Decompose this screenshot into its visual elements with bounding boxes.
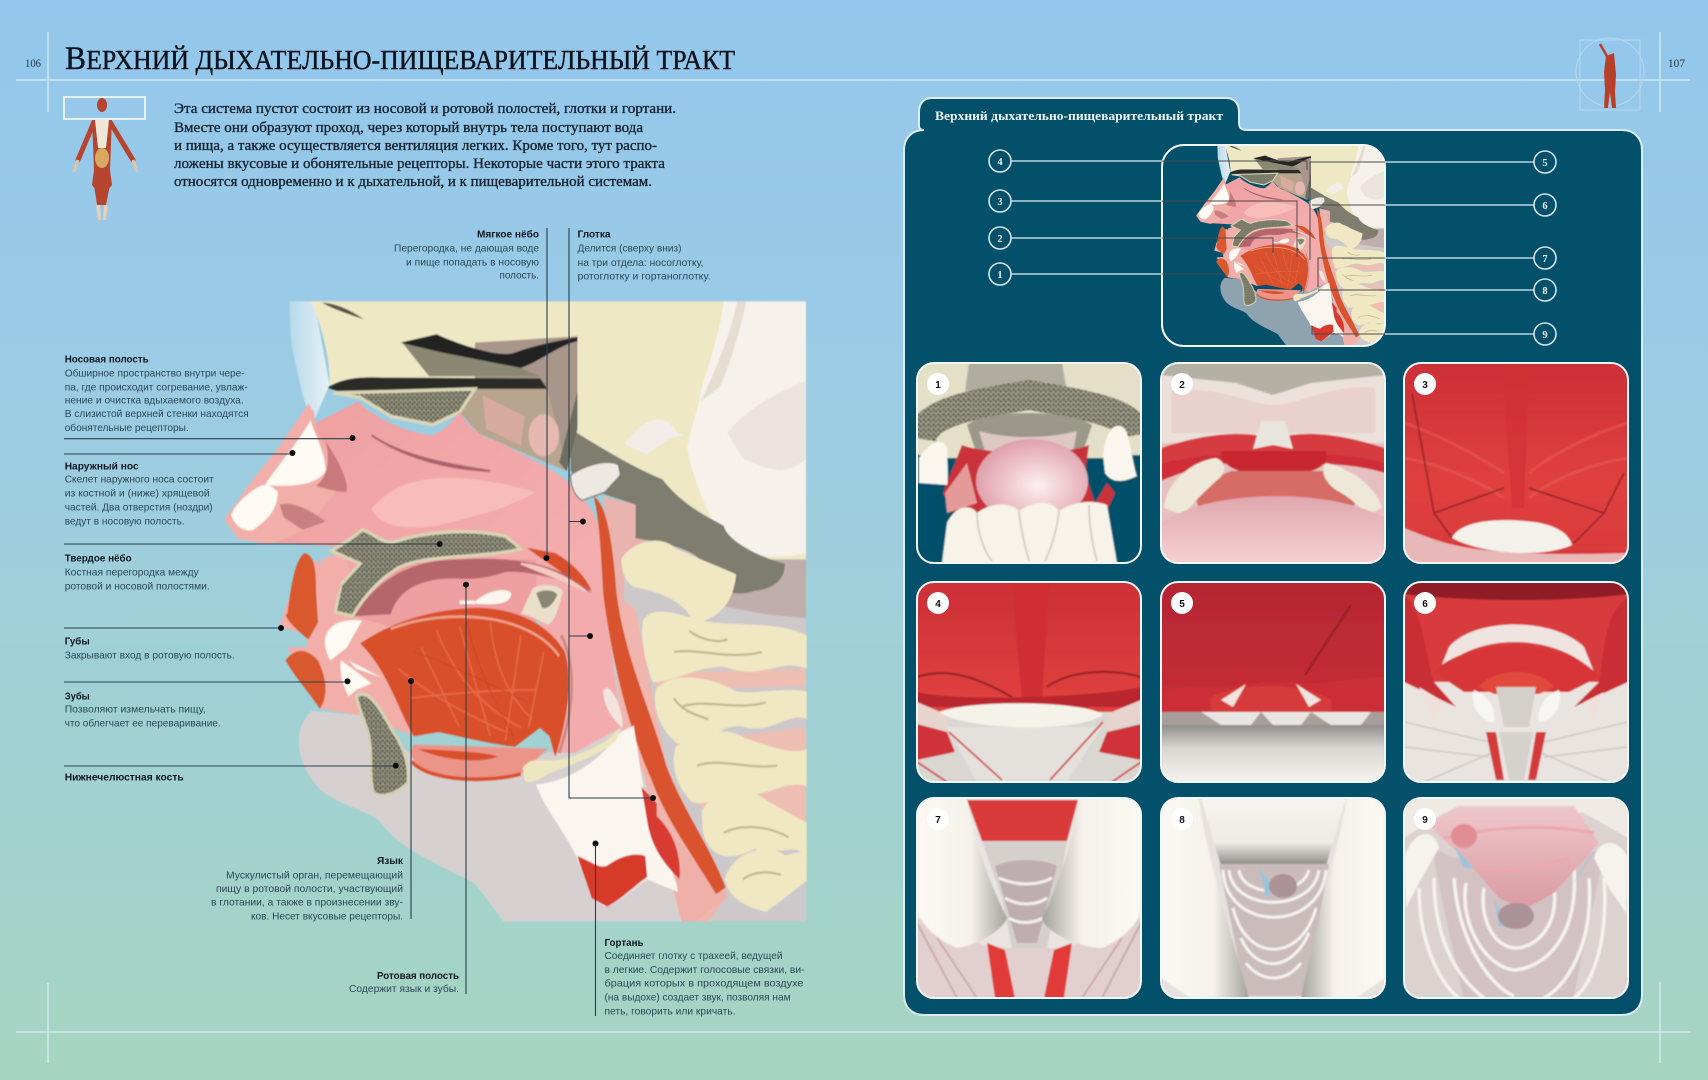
locator: small head section with numbered leaders: 1	[997, 270, 1003, 281]
intro text: ложены вкусовые и обонятельные рецепторы. Некоторые части этого тракта	[174, 156, 666, 172]
label: Мягкое нёбо	[394, 228, 539, 282]
anatomy illustration: head cross-section	[224, 301, 806, 921]
label: Глотка: Глотка	[578, 228, 611, 240]
label: Носовая полость: Обширное пространство внутри чере-	[65, 368, 245, 380]
label: Носовая полость: па, где происходит согревание, увлаж-	[65, 382, 248, 394]
label: Глотка: Делится (сверху вниз)	[578, 242, 682, 254]
label: Носовая полость	[65, 354, 249, 434]
thumbnail 3: soft palate	[1404, 363, 1628, 563]
label: Наружный нос: частей. Два отверстия (ноздри)	[65, 502, 213, 514]
label: Губы	[65, 636, 235, 662]
label: Наружный нос: из костной и (ниже) хрящевой	[65, 488, 210, 500]
label: Наружный нос	[65, 460, 214, 528]
thumbnail 4: uvula from behind: 4	[935, 599, 941, 610]
label: Ротовая полость: Ротовая полость	[377, 970, 459, 982]
thumbnail 9: epiglottis and vocal folds: 9	[1422, 815, 1428, 826]
label: Нижнечелюстная кость: Нижнечелюстная кость	[65, 772, 184, 784]
thumbnail 5: nasopharynx	[1161, 582, 1385, 782]
thumbnail 8: trachea view	[1161, 798, 1385, 998]
label: Язык: пищу в ротовой полости, участвующий	[216, 883, 403, 895]
thumbnail 3: soft palate: 3	[1422, 380, 1428, 391]
label: Носовая полость: Носовая полость	[65, 354, 149, 366]
label: Язык: Язык	[377, 855, 404, 867]
locator: small head section with numbered leaders: 2	[997, 234, 1003, 245]
label: Твердое нёбо: Костная перегородка между	[65, 566, 199, 578]
label: Носовая полость: В слизистой верхней стенки находятся	[65, 408, 249, 420]
icon: body locator figure left	[64, 97, 145, 220]
label: Ротовая полость: Содержит язык и зубы.	[349, 983, 459, 995]
label: Гортань: Соединяет глотку с трахеей, ведущей	[604, 950, 783, 962]
label: Гортань	[604, 937, 805, 1018]
label: Гортань: в легкие. Содержит голосовые связки, ви-	[604, 964, 805, 976]
panel: airway tour with tab	[904, 98, 1642, 1015]
label: Зубы: Позволяют измельчать пищу,	[65, 704, 206, 716]
label: Наружный нос: ведут в носовую полость.	[65, 516, 185, 528]
page number right: 107	[1668, 56, 1685, 70]
intro text: относятся одновременно и к дыхательной, и к пищеварительной системам.	[174, 174, 652, 190]
icon: body locator figure right	[1576, 38, 1644, 110]
thumbnail 1: view from mouth	[917, 363, 1141, 563]
label: Носовая полость: нение и очистка вдыхаемого воздуха.	[65, 394, 244, 406]
thumbnail 8: trachea view: 8	[1179, 815, 1185, 826]
label: Зубы	[65, 690, 221, 730]
label: Твердое нёбо: ротовой и носовой полостями.	[65, 580, 210, 592]
thumbnail 7: larynx from above	[917, 798, 1141, 998]
label: Гортань: брация которых в проходящем воздухе	[604, 978, 804, 990]
intro text	[174, 101, 676, 190]
label: Язык: Мускулистый орган, перемещающий	[226, 870, 403, 882]
locator: small head section with numbered leaders: 7	[1542, 254, 1548, 265]
label: Мягкое нёбо: Мягкое нёбо	[477, 228, 539, 240]
locator: small head section with numbered leaders: 8	[1542, 286, 1548, 297]
page number left: 106	[25, 56, 41, 70]
locator: small head section with numbered leaders: 4	[997, 157, 1003, 168]
label: Язык	[211, 855, 404, 922]
intro text: и пища, а также осуществляется вентиляция легких. Кроме того, тут распо-	[174, 138, 657, 154]
thumbnail 2: palate view	[1161, 363, 1385, 563]
label: Язык: в глотании, а также в произнесении зву-	[211, 896, 403, 908]
label: Гортань: (на выдохе) создает звук, позволяя нам	[604, 992, 790, 1004]
label: Носовая полость: обонятельные рецепторы.	[65, 422, 189, 434]
label: Мягкое нёбо: полость.	[500, 270, 539, 282]
label: Глотка: ротоглотку и гортаноглотку.	[578, 270, 710, 282]
locator: small head section with numbered leaders: 3	[997, 197, 1003, 208]
label: Глотка	[578, 228, 710, 282]
label: Глотка: на три отдела: носоглотку,	[578, 257, 704, 269]
thumbnail 5: nasopharynx: 5	[1179, 599, 1185, 610]
intro text: Вместе они образуют проход, через который внутрь тела поступают вода	[174, 120, 644, 136]
label: Гортань: Гортань	[604, 937, 644, 949]
label: Наружный нос: Скелет наружного носа состоит	[65, 474, 214, 486]
thumbnail 2: palate view: 2	[1179, 380, 1185, 391]
label: Наружный нос: Наружный нос	[65, 460, 139, 472]
label: Мягкое нёбо: Перегородка, не дающая воде	[394, 242, 539, 254]
title: ВЕРХНИЙ ДЫХАТЕЛЬНО-ПИЩЕВАРИТЕЛЬНЫЙ ТРАКТ	[65, 41, 735, 77]
label: Зубы: что облегчает ее переваривание.	[65, 718, 221, 730]
label: Ротовая полость	[349, 970, 459, 995]
thumbnail 6: pharynx opening: 6	[1422, 599, 1428, 610]
label: Зубы: Зубы	[65, 690, 90, 702]
panel tab heading: Верхний дыхательно-пищеварительный тракт	[935, 108, 1224, 123]
locator: small head section with numbered leaders	[989, 145, 1556, 346]
thumbnail 9: epiglottis and vocal folds	[1404, 798, 1628, 998]
thumbnail 1: view from mouth: 1	[935, 380, 941, 391]
locator: small head section with numbered leaders: 5	[1542, 158, 1548, 169]
locator: small head section with numbered leaders: 9	[1542, 330, 1548, 341]
locator: small head section with numbered leaders: 6	[1542, 201, 1548, 212]
label: Губы: Закрывают вход в ротовую полость.	[65, 650, 235, 662]
thumbnail 6: pharynx opening	[1404, 582, 1628, 782]
label: Твердое нёбо	[65, 552, 210, 592]
leader lines and dots for callouts	[64, 228, 656, 1016]
label: Губы: Губы	[65, 636, 90, 648]
label: Мягкое нёбо: и пище попадать в носовую	[406, 256, 539, 268]
thumbnail 7: larynx from above: 7	[935, 815, 941, 826]
intro text: Эта система пустот состоит из носовой и ротовой полостей, глотки и гортани.	[174, 101, 676, 117]
label: Твердое нёбо: Твердое нёбо	[65, 552, 132, 564]
label: Гортань: петь, говорить или кричать.	[604, 1006, 736, 1018]
label: Язык: ков. Несет вкусовые рецепторы.	[251, 910, 403, 922]
thumbnail 4: uvula from behind	[917, 582, 1141, 782]
